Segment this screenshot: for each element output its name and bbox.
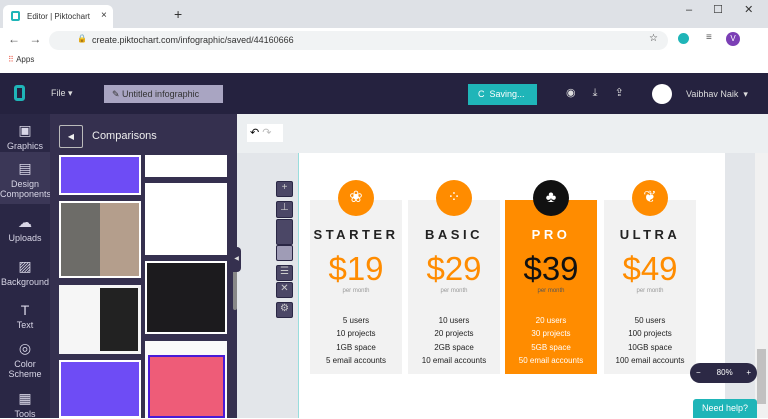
text: ❦	[643, 189, 657, 206]
card: ultra	[604, 200, 696, 374]
components panel: Comparisons	[92, 130, 157, 142]
card: pro: PRO	[532, 227, 570, 242]
card: basic: 20 projects	[434, 329, 474, 338]
card: ultra: 100 projects	[628, 329, 672, 338]
text: ⁘	[447, 189, 461, 206]
components panel	[50, 114, 237, 418]
zoom control	[690, 363, 757, 383]
left icon sidebar: Graphics	[7, 141, 43, 151]
card: pro: 5GB space	[531, 343, 571, 352]
address bar row: V	[730, 34, 736, 43]
title box: ✎ Untitled infographic	[112, 89, 199, 99]
left icon sidebar: T	[21, 302, 29, 318]
left icon sidebar: Background	[1, 277, 49, 287]
card: ultra: per month	[636, 288, 664, 294]
card: basic: $29	[426, 250, 482, 287]
text: ⊥	[280, 202, 289, 213]
card: starter: STARTER	[314, 227, 398, 242]
left icon sidebar: ▨	[18, 258, 32, 274]
saving button	[468, 84, 537, 105]
card: starter: per month	[342, 288, 370, 294]
card: starter: 5 email accounts	[326, 356, 386, 365]
card: starter: 5 users	[343, 316, 369, 325]
card: starter: 10 projects	[336, 329, 376, 338]
page	[298, 153, 725, 418]
left icon sidebar: Uploads	[8, 233, 42, 243]
card: pro: per month	[537, 288, 564, 294]
address bar row: ≡	[706, 32, 712, 43]
tab: ×	[101, 10, 107, 21]
left icon sidebar: Design	[11, 179, 39, 189]
card: ultra: ULTRA	[620, 227, 680, 242]
card: starter	[310, 200, 402, 374]
card: basic: 10 users	[439, 316, 469, 325]
address bar row	[0, 28, 768, 73]
text: ♣	[546, 189, 556, 206]
card: ultra: $49	[622, 250, 678, 287]
app header: File ▾	[51, 88, 73, 98]
tab: Editor | Piktochart	[27, 12, 90, 21]
card: ultra: 10GB space	[628, 343, 672, 352]
toolbar	[276, 181, 293, 197]
address bar row: ← → ↻	[8, 32, 61, 46]
left icon sidebar: Scheme	[8, 369, 42, 379]
text: ✕	[280, 283, 289, 294]
url	[49, 31, 668, 50]
canvas area: ↶ ↷	[250, 127, 272, 139]
card: pro: $39	[523, 250, 579, 287]
left icon sidebar	[0, 114, 50, 418]
left icon sidebar: Tools	[14, 409, 36, 419]
card: starter: $19	[328, 250, 384, 287]
left icon sidebar: Components	[0, 189, 51, 199]
text: ◀	[234, 256, 239, 262]
card: ultra: 100 email accounts	[616, 356, 684, 365]
card: ultra: 50 users	[635, 316, 665, 325]
saving button: C Saving...	[478, 89, 525, 99]
title box	[104, 85, 223, 103]
url: ☆	[649, 33, 658, 44]
left icon sidebar: ▤	[18, 160, 32, 176]
browser tab bar: – ☐ ✕	[686, 4, 753, 16]
card: basic: BASIC	[425, 227, 483, 242]
card: basic	[408, 200, 500, 374]
bookmarks: ⠿ Apps	[8, 55, 34, 64]
tab	[3, 5, 113, 28]
need help	[693, 399, 757, 418]
left icon sidebar: Text	[17, 320, 33, 330]
components panel: ◀	[68, 132, 74, 141]
thumbnails	[59, 155, 141, 195]
url: 🔒	[77, 34, 87, 43]
zoom control: − 80%	[696, 368, 733, 377]
browser tab bar	[0, 0, 768, 28]
left icon sidebar: ▦	[18, 390, 32, 406]
left icon sidebar: ◎	[19, 340, 31, 356]
card: starter: 1GB space	[336, 343, 376, 352]
card: pro	[505, 200, 597, 374]
left icon sidebar: ▣	[18, 122, 32, 138]
app header	[0, 73, 768, 114]
card: pro: 30 projects	[531, 329, 571, 338]
left icon sidebar: Color	[14, 359, 36, 369]
url: create.piktochart.com/infographic/saved/44160666	[92, 35, 294, 45]
browser tab bar: +	[174, 6, 182, 22]
zoom control: +	[746, 368, 751, 377]
text: ❀	[349, 189, 363, 206]
card: basic: per month	[440, 288, 468, 294]
card: pro: 20 users	[536, 316, 566, 325]
text: ⚙	[280, 303, 289, 314]
card: basic: 10 email accounts	[422, 356, 486, 365]
left icon sidebar: ☁	[18, 214, 32, 230]
app header: Vaibhav Naik ▾	[686, 89, 748, 99]
text: ☰	[280, 266, 289, 277]
need help: Need help?	[702, 403, 748, 413]
card: pro: 50 email accounts	[519, 356, 583, 365]
toolbar: +	[282, 182, 287, 193]
app header: ◉ ⤓ ⇪	[566, 87, 624, 99]
card: basic: 2GB space	[434, 343, 474, 352]
canvas area	[237, 114, 768, 418]
